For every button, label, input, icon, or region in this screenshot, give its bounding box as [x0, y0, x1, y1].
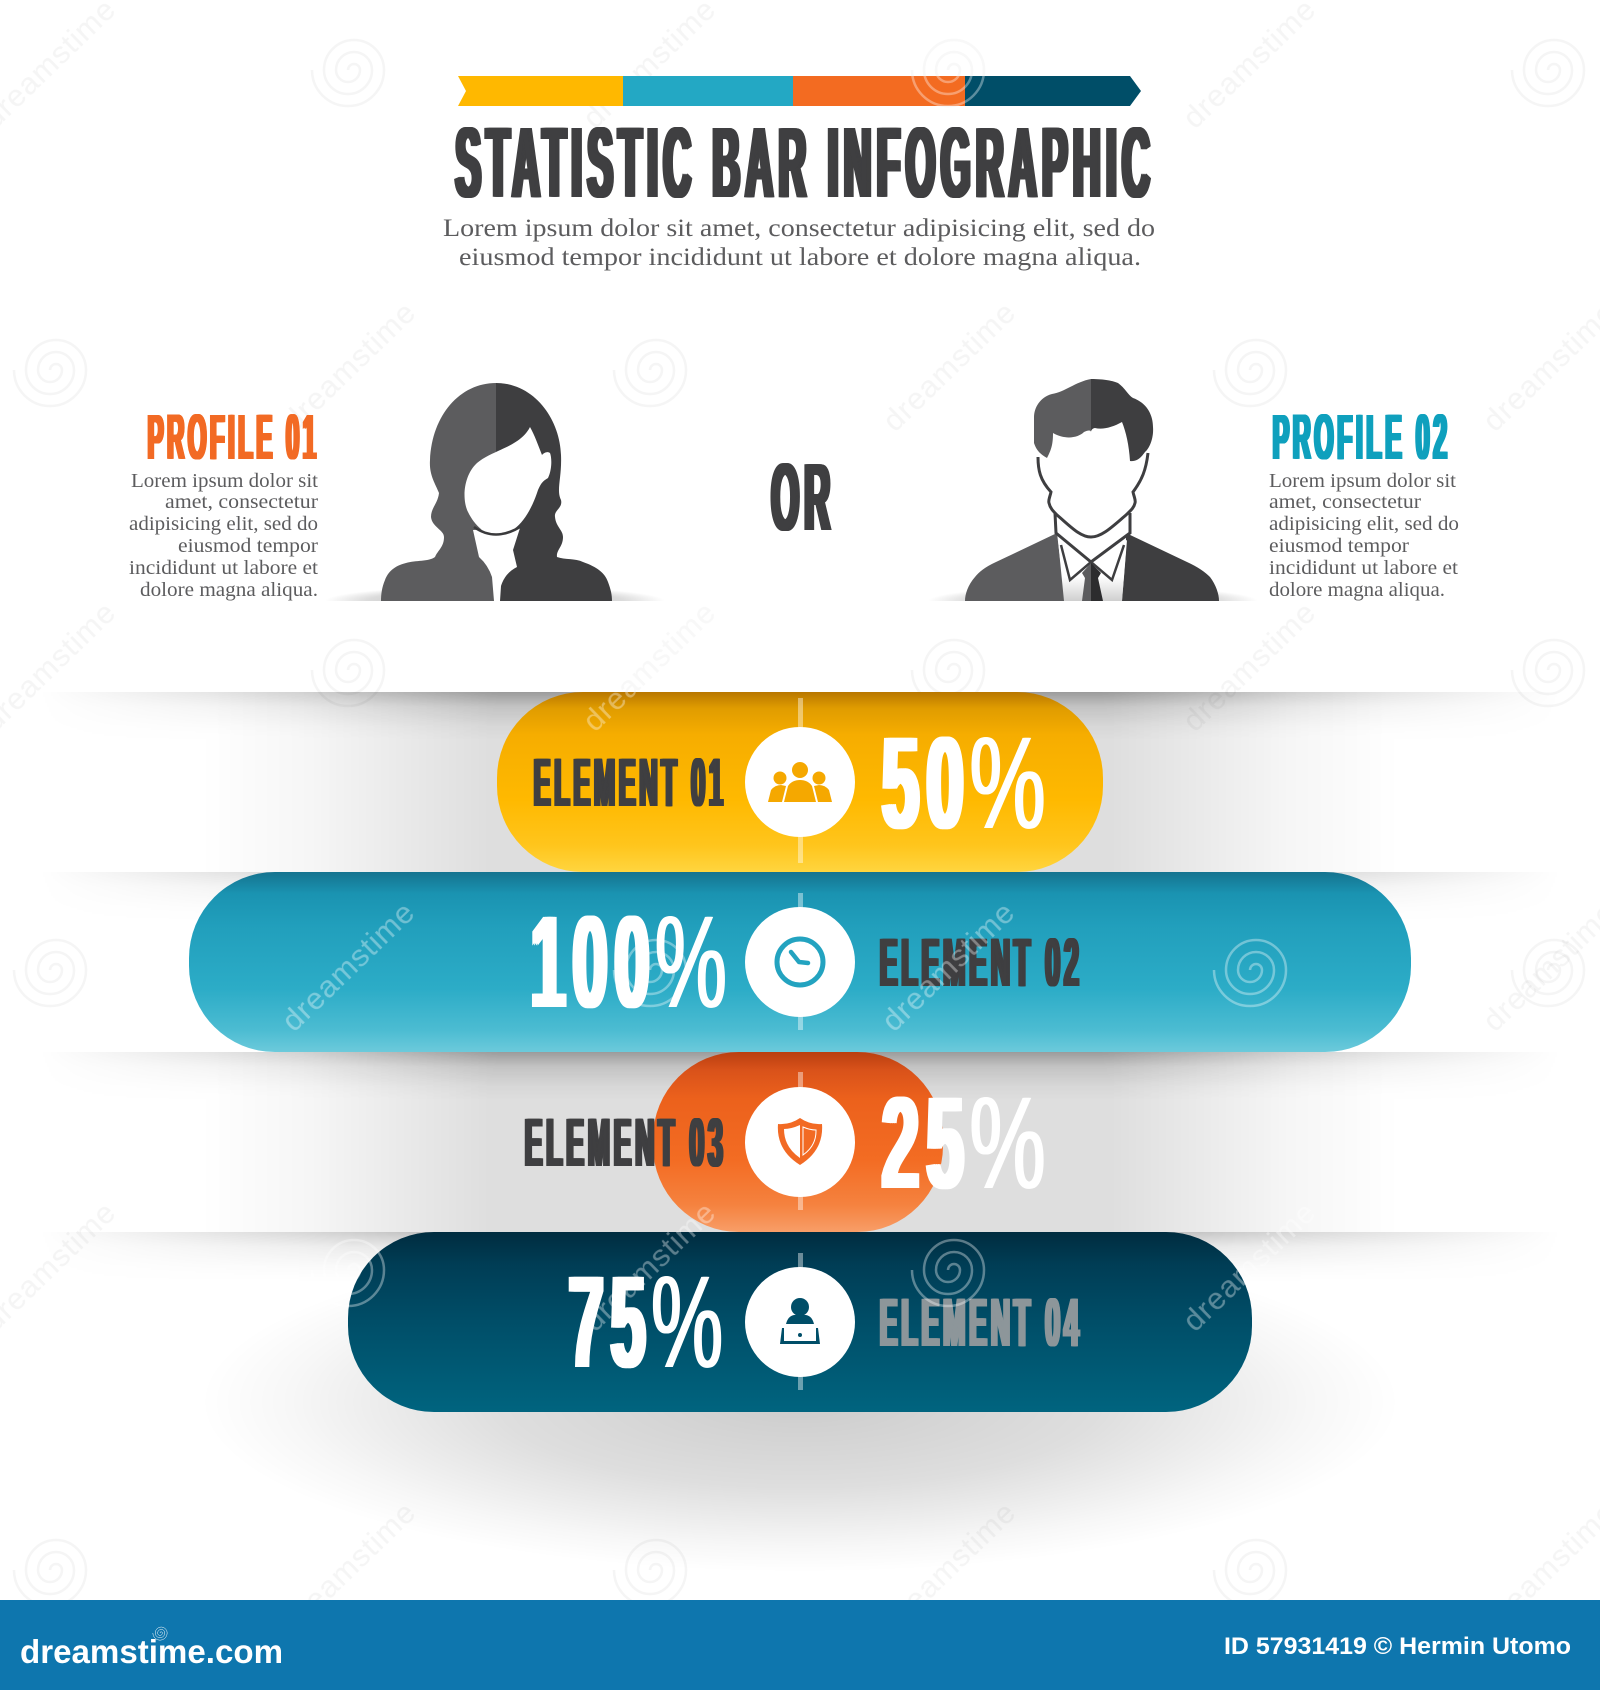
value: %: [968, 709, 1044, 856]
icon: woman avatar: [335, 383, 655, 601]
subtitle text: Lorem ipsum dolor sit amet, consectetur adipisicing elit, sed do: [443, 215, 1155, 242]
value: 75: [566, 1248, 650, 1395]
panel: element 01 row: [98, 692, 1502, 872]
watermarks over coloured bars: dreamstime: [274, 895, 421, 1038]
label: ELEMENT 03: [523, 1105, 725, 1181]
panel: element 04 row: [98, 1232, 1502, 1412]
profile 02 heading: PROFILE 02: [1271, 401, 1449, 473]
profile 01 description: Lorem ipsum dolor sit: [131, 471, 319, 492]
panel: element 02 row: [98, 872, 1502, 1052]
label: ELEMENT 04: [878, 1285, 1081, 1361]
panel: element 03 row: [98, 1052, 1502, 1232]
value: [528, 888, 726, 1035]
value: 100: [528, 888, 654, 1035]
value: 25: [879, 1069, 968, 1216]
footer logo and credit: dreamstime.com: [20, 1633, 283, 1670]
blue pill: [189, 872, 1411, 1052]
value: [879, 1069, 1044, 1216]
profile 02 description: eiusmod tempor: [1269, 536, 1410, 557]
yellow pill: [497, 692, 1103, 872]
icon circle: [745, 727, 855, 837]
profile 02 description: incididunt ut labore et: [1269, 558, 1459, 579]
value: [566, 1248, 722, 1395]
profile 01 description: incididunt ut labore et: [129, 558, 319, 579]
subtitle text: [443, 215, 1155, 271]
icon circle: [745, 907, 855, 1017]
value: %: [968, 1069, 1044, 1216]
background watermark spirals and wordmarks: dreamstime: [275, 295, 422, 438]
watermarks over coloured bars: dreamstime: [575, 595, 722, 738]
value: %: [650, 1248, 722, 1395]
background watermark spirals and wordmarks: dreamstime: [875, 1495, 1022, 1638]
profile 01 heading: PROFILE 01: [146, 401, 318, 473]
background watermark spirals and wordmarks: dreamstime: [1175, 595, 1322, 738]
background watermark spirals and wordmarks: dreamstime: [275, 1495, 422, 1638]
profile 02 description: dolore magna aliqua.: [1269, 580, 1445, 601]
icon: man avatar: [938, 379, 1248, 601]
background watermark spirals and wordmarks: dreamstime: [875, 295, 1022, 438]
value: 50: [879, 709, 968, 856]
watermarks over coloured bars: dreamstime: [874, 895, 1021, 1038]
profile 02 description: adipisicing elit, sed do: [1269, 514, 1459, 535]
icon: team of people: [768, 762, 832, 802]
header colour ribbon: [458, 76, 1141, 106]
footer logo and credit: [20, 1626, 1571, 1670]
icon: person at laptop: [780, 1298, 820, 1344]
label: ELEMENT 02: [878, 925, 1081, 1001]
icon circle: [745, 1087, 855, 1197]
value: [879, 709, 1044, 856]
profile 01 description: [129, 471, 319, 601]
title: STATISTIC BAR INFOGRAPHIC: [453, 107, 1153, 219]
profile 02 description: [1269, 471, 1459, 601]
icon: shield: [778, 1118, 822, 1165]
soft shadow around last row: [160, 1232, 1440, 1572]
profile 01 description: dolore magna aliqua.: [140, 580, 318, 601]
watermarks over coloured bars: dreamstime: [575, 1195, 722, 1338]
background watermark spirals and wordmarks: dreamstime: [575, 595, 722, 738]
footer logo and credit: ID 57931419 © Hermin Utomo: [1224, 1633, 1571, 1660]
subtitle text: eiusmod tempor incididunt ut labore et dolore magna aliqua.: [459, 244, 1141, 271]
navy pill: [348, 1232, 1252, 1412]
watermarks over coloured bars: dreamstime: [1175, 1195, 1322, 1338]
value: %: [654, 888, 726, 1035]
or label: OR: [769, 444, 833, 551]
profile 02 description: Lorem ipsum dolor sit: [1269, 471, 1457, 492]
footer bar: [0, 1600, 1600, 1690]
profile 01 description: adipisicing elit, sed do: [129, 514, 318, 535]
orange pill: [653, 1052, 943, 1232]
profile 01 description: eiusmod tempor: [178, 536, 319, 557]
label: ELEMENT 01: [532, 745, 725, 821]
profile 01 description: amet, consectetur: [165, 492, 319, 513]
icon: clock: [774, 936, 826, 988]
icon circle: [745, 1267, 855, 1377]
profile 02 description: amet, consectetur: [1269, 492, 1422, 513]
